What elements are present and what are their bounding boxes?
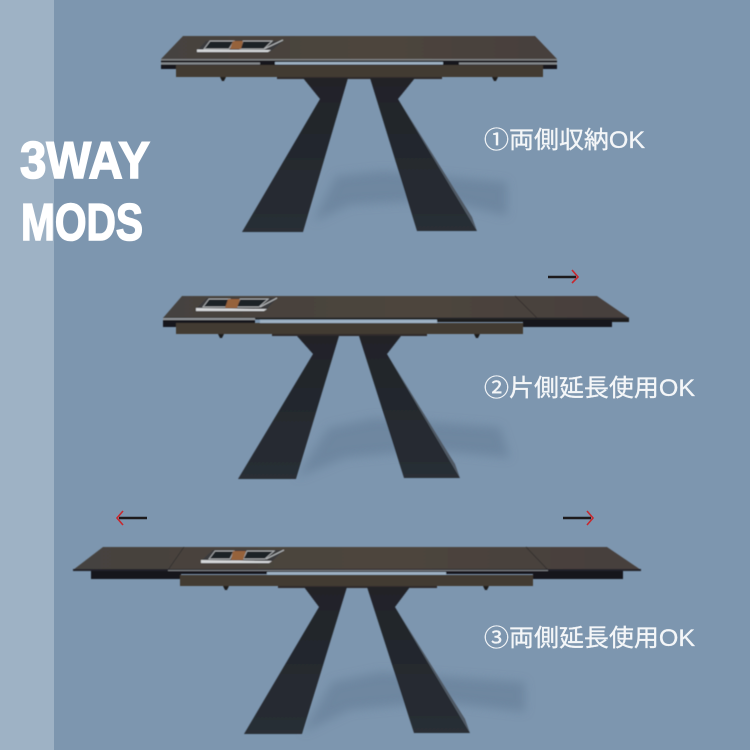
magazine on table [201, 550, 284, 563]
left leg [242, 78, 348, 232]
table top [163, 296, 629, 318]
under frame [176, 320, 612, 338]
arrow right, table 3 [563, 511, 593, 525]
title: 3WAY MODS: MODS [21, 194, 143, 252]
right leg [367, 587, 470, 733]
magazine on table [196, 298, 277, 311]
left leg [244, 587, 347, 734]
title: 3WAY MODS [20, 132, 150, 252]
table 2: one side extended [163, 296, 629, 479]
table 3: both sides extended [73, 547, 641, 734]
arrow left, table 3 [117, 511, 147, 525]
magazine on table [197, 40, 283, 52]
floor shadow [302, 672, 525, 733]
right leg [359, 336, 460, 478]
floor shadow [296, 418, 510, 478]
table top [73, 547, 641, 570]
under frame [176, 65, 543, 81]
right leg [370, 78, 477, 231]
edge strip [161, 59, 557, 69]
edge strip [163, 318, 629, 327]
under frame [91, 571, 623, 590]
seam [515, 296, 537, 318]
left leg [238, 336, 339, 479]
seams [168, 547, 548, 570]
arrow right, table 2 [548, 270, 578, 283]
label 1: ①両側収納OK [484, 127, 645, 154]
left band [0, 0, 54, 750]
table top [161, 36, 557, 59]
label 2: ②片側延長使用OK [484, 375, 695, 402]
title: 3WAY MODS: 3WAY [20, 132, 150, 190]
edge strip [73, 569, 641, 574]
floor shadow [313, 171, 507, 222]
table 1: both sides stowed [161, 36, 557, 232]
label 3: ③両側延長使用OK [484, 625, 695, 652]
